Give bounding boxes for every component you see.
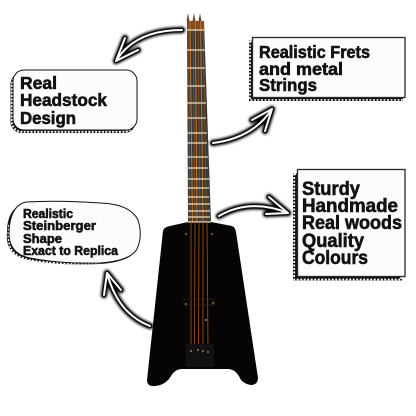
- heading: realistic frets and metal strings: Realistic Frets: [259, 42, 370, 62]
- heading: realistic steinberger shape: Steinberger: [23, 218, 96, 233]
- heading: realistic frets and metal strings: and metal: [259, 59, 343, 79]
- feature list: [302, 179, 402, 269]
- heading: realistic steinberger shape: Realistic: [23, 206, 73, 221]
- callout: realistic frets: [249, 38, 405, 101]
- heading: real headstock design: Real: [20, 73, 57, 93]
- callout: real headstock design: [10, 70, 137, 133]
- heading: realistic steinberger shape: Shape: [23, 231, 62, 246]
- feature list: Handmade: [302, 196, 398, 217]
- arrow: to steinberger shape: [104, 273, 150, 326]
- heading: realistic steinberger shape: Exact to Replica: [23, 243, 119, 258]
- feature list: Quality: [302, 231, 364, 252]
- guitar: [147, 13, 258, 386]
- arrow: to headstock: [116, 30, 182, 61]
- heading: real headstock design: Design: [20, 108, 76, 128]
- heading: realistic frets and metal strings: Strings: [259, 75, 317, 95]
- feature list: Colours: [302, 248, 368, 269]
- neck: [186, 13, 211, 222]
- heading: realistic steinberger shape: [23, 206, 119, 258]
- guitar body: [147, 222, 258, 386]
- feature list: Real woods: [302, 213, 402, 234]
- callout: steinberger shape: [7, 201, 140, 264]
- callout: sturdy handmade: [293, 170, 405, 280]
- heading: realistic frets and metal strings: [259, 42, 370, 95]
- strings and pickups: [184, 222, 214, 367]
- arrow: to frets: [213, 109, 272, 143]
- feature list: Sturdy: [302, 179, 360, 200]
- heading: real headstock design: [20, 73, 107, 128]
- heading: real headstock design: Headstock: [20, 90, 107, 110]
- arrow: to sturdy box: [219, 197, 288, 216]
